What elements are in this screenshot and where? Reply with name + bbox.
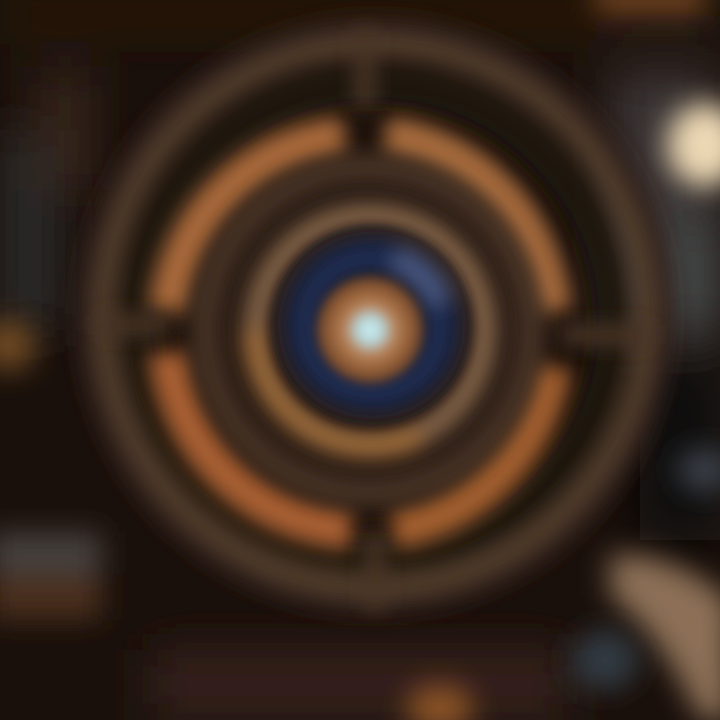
- object: right grey shape: [677, 448, 720, 492]
- wheel: inner tan ring: [254, 216, 484, 446]
- lamp: top right highlight: [667, 103, 720, 187]
- wheel: dark band around blue: [280, 233, 464, 417]
- wheel: orange ring segments: [168, 136, 552, 530]
- wheel: mid bands: [203, 165, 533, 495]
- light: bottom orange glow: [406, 684, 474, 720]
- object: bottom left block: [0, 532, 102, 620]
- wheel: ring spokes: [100, 30, 650, 610]
- light: left orange spot: [0, 319, 36, 371]
- light: top orange glow: [595, 0, 705, 12]
- wheel: glowing core: [316, 276, 424, 384]
- wheel: blue ring: [304, 257, 442, 393]
- object: bottom right tan shape: [610, 555, 720, 720]
- wheel: outer rings: [93, 34, 657, 598]
- object: bottom right grey shape: [571, 630, 639, 690]
